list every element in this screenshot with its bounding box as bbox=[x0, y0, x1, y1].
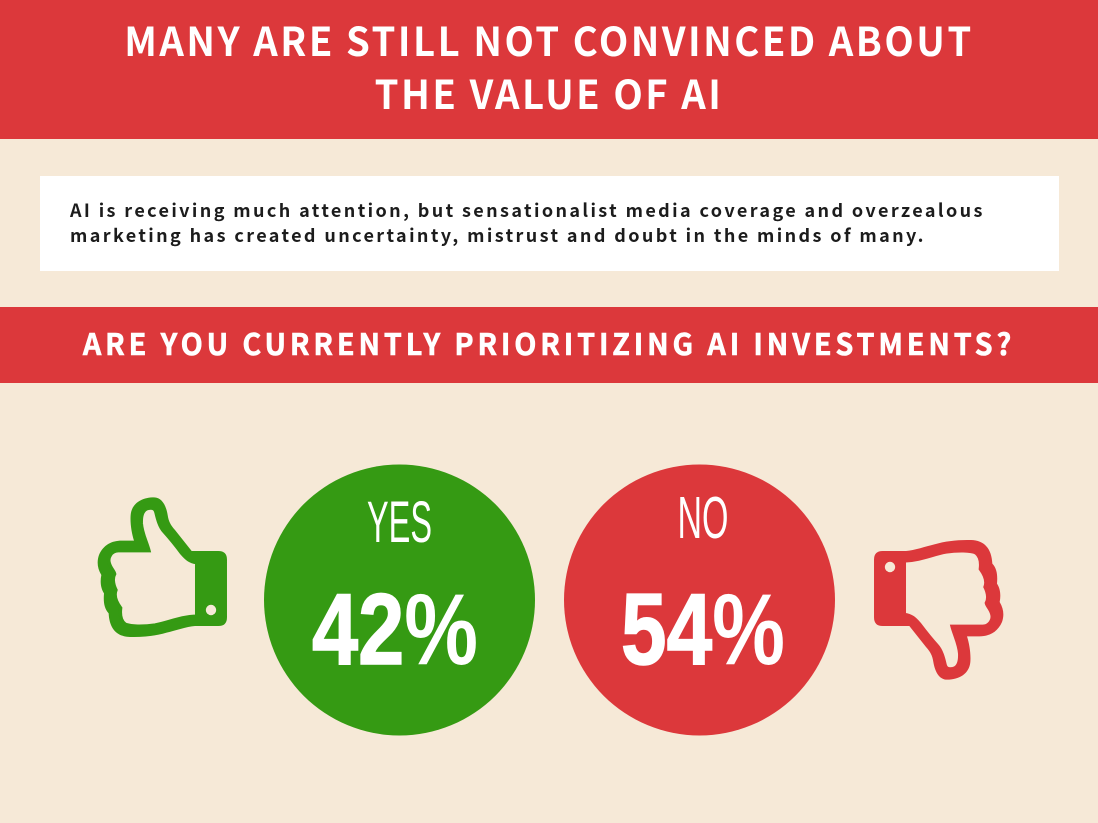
yes circle bbox=[264, 464, 535, 736]
title: MANY ARE STILL NOT CONVINCED ABOUT bbox=[124, 10, 974, 68]
title bbox=[124, 10, 974, 120]
yes label: YES bbox=[367, 490, 432, 555]
icon: thumbs up bbox=[98, 497, 227, 637]
icon: thumbs down bbox=[874, 540, 1003, 680]
intro text: marketing has created uncertainty, mistrust and doubt in the minds of many. bbox=[70, 222, 926, 248]
intro text panel bbox=[40, 176, 1059, 271]
no circle bbox=[564, 464, 835, 736]
question heading: ARE YOU CURRENTLY PRIORITIZING AI INVESTMENTS? bbox=[83, 320, 1015, 364]
question banner bbox=[0, 307, 1098, 383]
yes percentage: 42% bbox=[312, 574, 478, 686]
no label: NO bbox=[678, 485, 728, 551]
title banner bbox=[0, 0, 1098, 139]
intro text bbox=[70, 197, 985, 248]
no percentage: 54% bbox=[621, 574, 785, 686]
intro text: AI is receiving much attention, but sensationalist media coverage and overzealous bbox=[70, 197, 985, 223]
title: THE VALUE OF AI bbox=[375, 62, 723, 120]
